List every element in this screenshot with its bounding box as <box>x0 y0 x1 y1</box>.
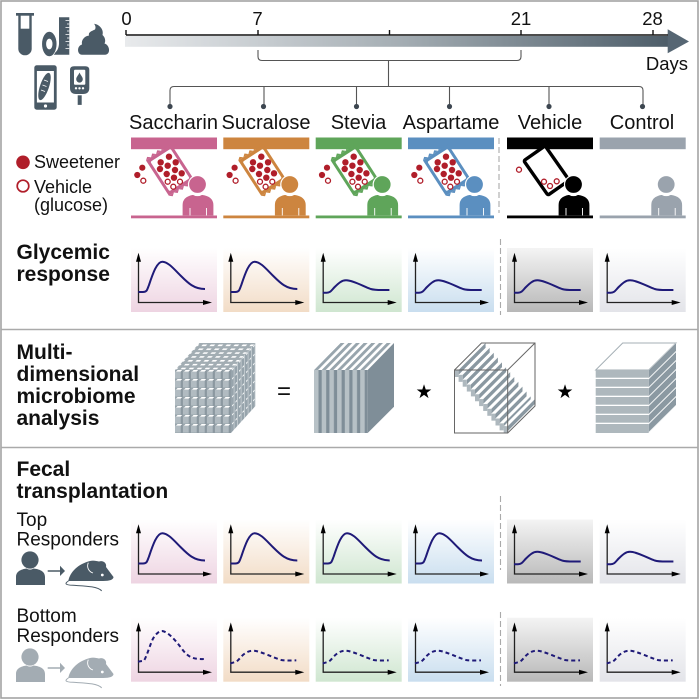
heading: multi-dimensional microbiome analysis: dimensional <box>16 363 139 386</box>
vertical slices cube <box>314 343 394 433</box>
top responder charts <box>131 520 686 584</box>
chart: sucralose <box>223 520 309 584</box>
chart: stevia <box>316 248 402 312</box>
chart: aspartame <box>408 618 494 682</box>
heading: glycemic response: Glycemic <box>16 241 110 264</box>
heading: fecal transplantation: Fecal <box>16 458 70 481</box>
heading: multi-dimensional microbiome analysis: analysis <box>16 407 99 430</box>
chart: control <box>600 520 686 584</box>
group names: Saccharin <box>129 112 218 134</box>
chart: vehicle <box>507 248 593 312</box>
chart: stevia <box>316 520 402 584</box>
group: control <box>600 138 686 218</box>
legend <box>16 152 120 215</box>
timeline <box>121 8 689 74</box>
group: sucralose <box>223 138 309 218</box>
day labels: 21 <box>511 8 531 29</box>
group: vehicle <box>507 138 593 218</box>
bottom responder charts <box>131 618 686 682</box>
star: ★ <box>556 381 574 403</box>
legend: Sweetener <box>34 152 120 172</box>
day labels <box>121 8 663 29</box>
icon: test tube <box>16 13 34 55</box>
icon: glucose meter <box>70 66 89 105</box>
heading: fecal transplantation: transplantation <box>16 480 168 503</box>
day labels: 7 <box>252 8 263 29</box>
tensor cube <box>175 343 256 433</box>
star: ★ <box>415 381 433 403</box>
bottom responders label: Responders <box>16 626 119 647</box>
group: stevia <box>316 138 402 218</box>
top responders label: Responders <box>16 530 119 550</box>
chart: vehicle <box>507 618 593 682</box>
chart: saccharin <box>131 520 217 584</box>
chart: saccharin <box>131 618 217 682</box>
icon: human to mouse, top <box>16 551 114 591</box>
chart: sucralose <box>223 248 309 312</box>
icon: stool <box>78 24 109 55</box>
bottom responders label: Bottom <box>16 606 77 627</box>
heading: multi-dimensional microbiome analysis <box>16 341 139 430</box>
group names: Vehicle <box>518 112 582 134</box>
horizontal slices cube <box>596 343 676 433</box>
chart: vehicle <box>507 520 593 584</box>
heading: multi-dimensional microbiome analysis: microbiome <box>16 385 136 408</box>
group names: Sucralose <box>222 112 310 134</box>
top responders label: Top <box>16 510 47 531</box>
chart: aspartame <box>408 248 494 312</box>
group names: Control <box>610 112 674 134</box>
day labels: 0 <box>121 8 132 29</box>
heading: glycemic response <box>16 241 110 286</box>
group: saccharin <box>131 138 217 218</box>
chart: saccharin <box>131 248 217 312</box>
chart: stevia <box>316 618 402 682</box>
icon: phone with food <box>34 65 57 110</box>
legend: Vehicle <box>34 177 92 197</box>
days axis label: Days <box>646 53 688 74</box>
diagonal slices cube <box>454 343 535 433</box>
heading: glycemic response: response <box>16 263 110 286</box>
top responders label <box>16 510 119 550</box>
chart: control <box>600 618 686 682</box>
group: aspartame <box>408 138 494 218</box>
glycemic charts <box>131 248 686 312</box>
heading: fecal transplantation <box>16 458 168 503</box>
heading: multi-dimensional microbiome analysis: Multi- <box>16 341 72 364</box>
icon: tape measure <box>42 17 69 57</box>
timeline bar with arrow <box>125 29 689 53</box>
group names <box>129 112 674 134</box>
icons: sample collection <box>16 13 109 110</box>
timeline ticks <box>126 30 668 35</box>
chart: sucralose <box>223 618 309 682</box>
icon: human to mouse, bottom <box>16 648 114 688</box>
group names: Aspartame <box>403 112 499 134</box>
legend: (glucose) <box>34 195 108 215</box>
dashed dividers <box>499 138 500 686</box>
bottom responders label <box>16 606 119 647</box>
chart: control <box>600 248 686 312</box>
bracket to groups <box>167 50 645 109</box>
equals sign: = <box>277 378 291 405</box>
group names: Stevia <box>331 112 387 134</box>
day labels: 28 <box>642 8 663 29</box>
chart: aspartame <box>408 520 494 584</box>
